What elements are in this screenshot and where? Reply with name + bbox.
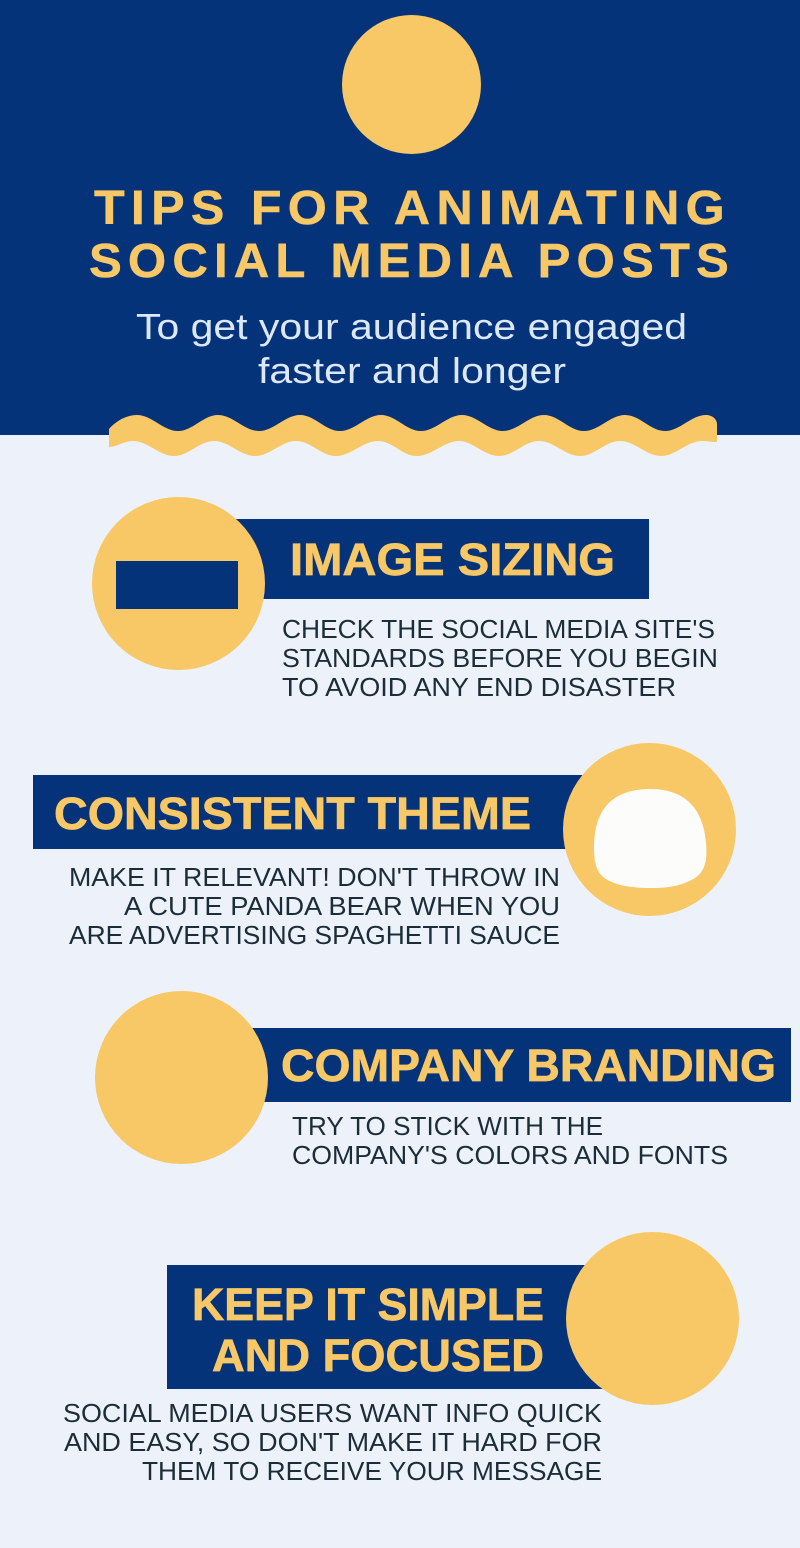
icon circle: company branding	[95, 991, 268, 1164]
title: SOCIAL MEDIA POSTS	[89, 235, 735, 288]
header panel	[0, 0, 800, 435]
text: consistent theme: A CUTE PANDA BEAR WHEN YOU	[124, 891, 560, 921]
heading: company branding: COMPANY BRANDING	[281, 1040, 776, 1091]
text: image sizing: CHECK THE SOCIAL MEDIA SITE'S	[282, 614, 715, 644]
text: consistent theme: ARE ADVERTISING SPAGHETTI SAUCE	[69, 920, 560, 950]
heading: keep it simple: KEEP IT SIMPLE	[192, 1279, 544, 1330]
icon circle: keep it simple	[566, 1232, 739, 1405]
heading bar: image sizing	[225, 519, 649, 599]
heading: keep it simple: AND FOCUSED	[212, 1330, 544, 1381]
icon circle: consistent theme	[563, 743, 736, 916]
section: image sizing	[92, 497, 718, 702]
subtitle: faster and longer	[258, 350, 566, 391]
text: keep it simple: SOCIAL MEDIA USERS WANT INFO QUICK	[63, 1398, 603, 1428]
wavy divider	[109, 415, 717, 456]
heading bar: company branding	[240, 1028, 791, 1102]
heading bar: consistent theme	[33, 775, 593, 849]
header circle	[342, 15, 481, 154]
text: keep it simple	[63, 1398, 603, 1486]
title: TIPS FOR ANIMATING	[94, 182, 731, 235]
heading: keep it simple	[192, 1279, 544, 1381]
text: consistent theme: MAKE IT RELEVANT! DON'T THROW IN	[69, 862, 560, 892]
text: keep it simple: AND EASY, SO DON'T MAKE IT HARD FOR	[64, 1427, 602, 1457]
text: image sizing: STANDARDS BEFORE YOU BEGIN	[282, 643, 718, 673]
title	[89, 182, 735, 288]
heading: image sizing: IMAGE SIZING	[290, 534, 615, 585]
heading bar: keep it simple	[167, 1265, 607, 1389]
text: consistent theme	[69, 862, 560, 950]
section: consistent theme	[33, 743, 736, 950]
section: keep it simple	[63, 1232, 739, 1486]
icon circle: image sizing	[92, 497, 265, 670]
subtitle: To get your audience engaged	[136, 306, 687, 347]
text: company branding: TRY TO STICK WITH THE	[292, 1111, 603, 1141]
text: image sizing: TO AVOID ANY END DISASTER	[282, 672, 676, 702]
text: company branding	[292, 1111, 728, 1170]
icon: wide rectangle	[116, 561, 238, 609]
text: image sizing	[282, 614, 718, 702]
text: company branding: COMPANY'S COLORS AND FONTS	[292, 1140, 728, 1170]
heading: consistent theme: CONSISTENT THEME	[54, 788, 531, 839]
section: company branding	[95, 991, 791, 1170]
icon: white blob	[594, 789, 706, 888]
subtitle	[136, 306, 687, 391]
text: keep it simple: THEM TO RECEIVE YOUR MESSAGE	[142, 1456, 602, 1486]
